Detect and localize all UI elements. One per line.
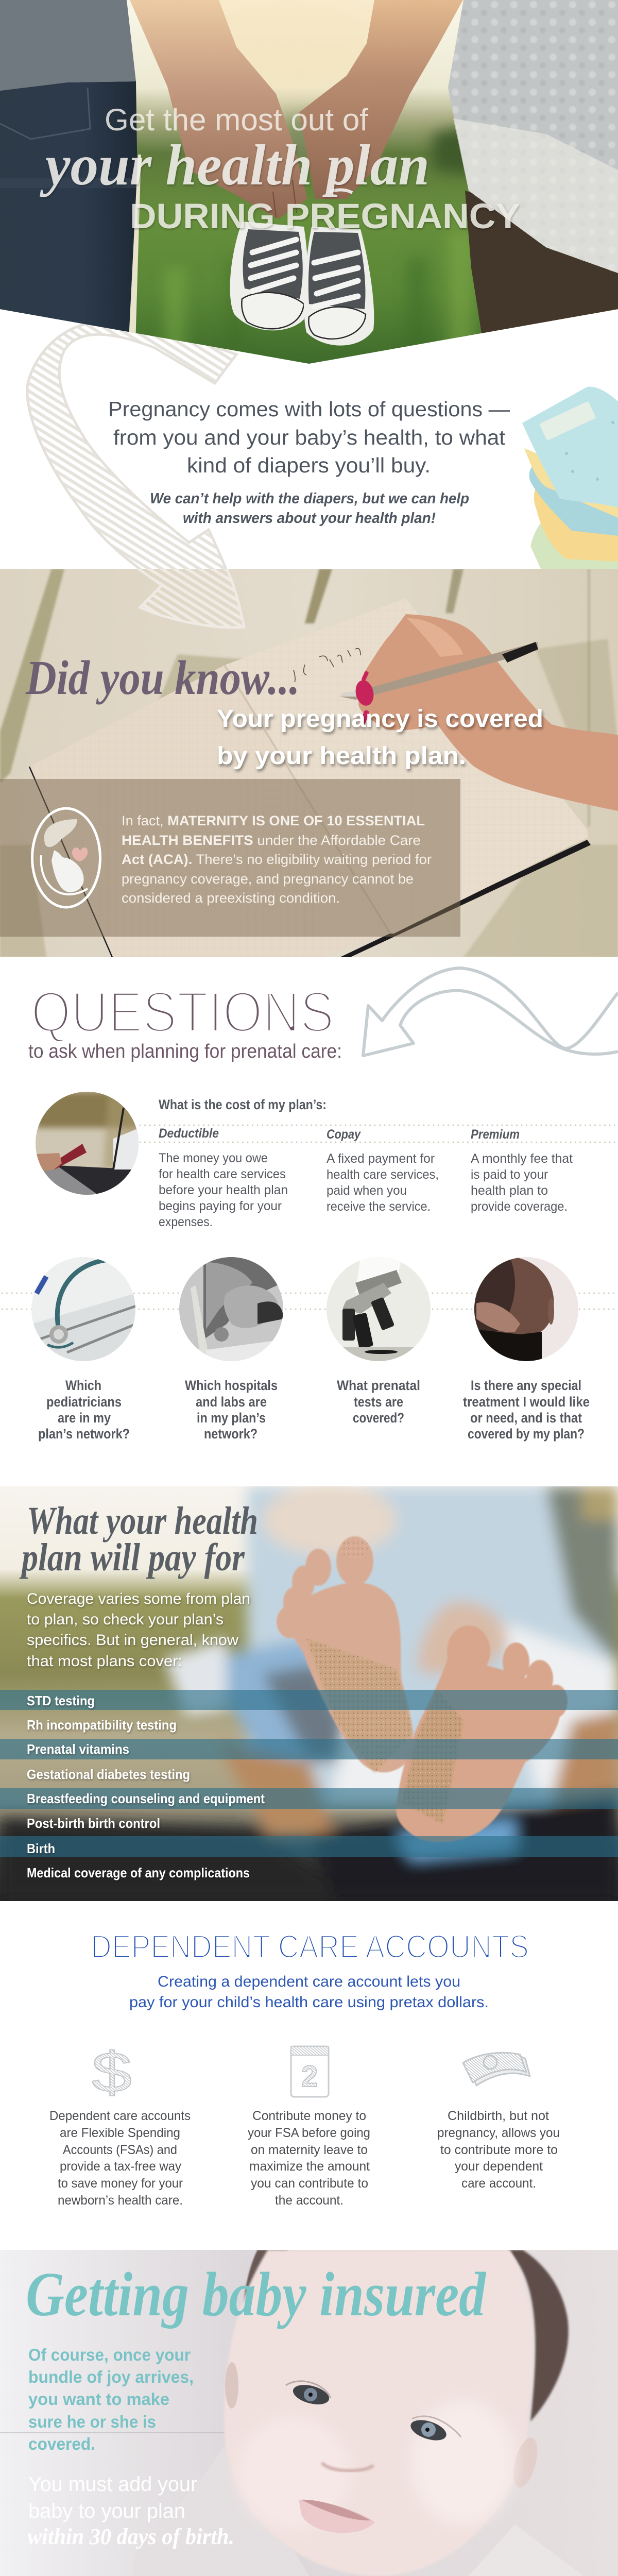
column text: childbirth: your dependent bbox=[455, 2159, 543, 2174]
column: copay bbox=[327, 1127, 439, 1214]
question captions: plan’s network? bbox=[38, 1426, 130, 1442]
column: premium: Premium bbox=[471, 1127, 520, 1142]
arrow tip overlay bbox=[132, 564, 244, 628]
panel: getting baby insured bbox=[0, 2250, 618, 2576]
column: copay: paid when you bbox=[327, 1183, 407, 1198]
intro text: Pregnancy comes with lots of questions — bbox=[108, 397, 510, 421]
coverage list: STD testing bbox=[27, 1693, 95, 1708]
questions heading: QUESTIONS bbox=[31, 980, 334, 1044]
30 days message: within 30 days of birth. bbox=[27, 2524, 234, 2549]
hero title bbox=[39, 103, 520, 236]
callout text: Act (ACA). There’s no eligibility waiting period for bbox=[122, 852, 432, 867]
question captions: Is there any special bbox=[471, 1378, 581, 1393]
photo: newborn bbox=[178, 1257, 283, 1362]
panel: intro bbox=[26, 324, 618, 569]
question captions: covered? bbox=[353, 1410, 404, 1426]
column text: dependent accounts: newborn’s health care. bbox=[58, 2193, 183, 2208]
arrow: curved outline bbox=[363, 968, 618, 1056]
cost heading: What is the cost of my plan’s: bbox=[159, 1097, 327, 1112]
column text: dependent accounts: Accounts (FSAs) and bbox=[63, 2143, 177, 2157]
column: deductible: expenses. bbox=[159, 1215, 213, 1229]
question captions: are in my bbox=[58, 1410, 111, 1426]
did you know heading: Did you know... bbox=[25, 651, 300, 705]
column: deductible: begins paying for your bbox=[159, 1199, 282, 1213]
callout text: pregnancy coverage, and pregnancy cannot be bbox=[122, 871, 414, 887]
column: deductible: The money you owe bbox=[159, 1151, 268, 1165]
photo: baby feet bbox=[0, 1484, 618, 1901]
hatched arrow bbox=[27, 322, 244, 628]
coverage list: Prenatal vitamins bbox=[27, 1741, 129, 1757]
icon: calendar bbox=[291, 2046, 329, 2097]
photo: microscope bbox=[325, 1257, 432, 1362]
icon: calendar: 2 bbox=[301, 2060, 318, 2093]
covered statement: by your health plan. bbox=[217, 742, 466, 770]
coverage list: Breastfeeding counseling and equipment bbox=[27, 1791, 265, 1806]
hero title: Get the most out of bbox=[105, 103, 368, 137]
column: premium: provide coverage. bbox=[471, 1199, 568, 1214]
coverage list: Rh incompatibility testing bbox=[27, 1717, 177, 1733]
column text: contribute: maximize the amount bbox=[249, 2159, 370, 2174]
question captions: covered by my plan? bbox=[468, 1426, 585, 1442]
photo: baby face bbox=[0, 2250, 618, 2576]
hero title: DURING PREGNANCY bbox=[130, 196, 520, 236]
column: deductible: for health care services bbox=[159, 1167, 286, 1181]
icon: pregnant mother bbox=[32, 808, 100, 907]
coverage list bbox=[27, 1693, 265, 1880]
feet heading: What your health bbox=[27, 1499, 258, 1543]
dependent care subheading: pay for your child’s health care using pretax dollars. bbox=[129, 1994, 489, 2011]
column text: dependent accounts: provide a tax-free way bbox=[60, 2159, 181, 2174]
coverage list: Medical coverage of any complications bbox=[27, 1865, 250, 1880]
coverage list: Gestational diabetes testing bbox=[27, 1767, 190, 1782]
icon: baby shoes bbox=[230, 222, 374, 346]
column: premium: A monthly fee that bbox=[471, 1151, 573, 1166]
baby text: sure he or she is bbox=[28, 2412, 156, 2431]
question captions bbox=[38, 1378, 590, 1442]
feet heading: plan will pay for bbox=[19, 1536, 245, 1579]
column text: contribute: the account. bbox=[275, 2193, 344, 2208]
questions heading: to ask when planning for prenatal care: bbox=[28, 1041, 342, 1062]
coverage intro text: specifics. But in general, know bbox=[27, 1632, 238, 1649]
column: deductible: Deductible bbox=[159, 1126, 219, 1141]
intro text bbox=[108, 397, 510, 527]
callout text: HEALTH BENEFITS under the Affordable Care bbox=[122, 833, 421, 848]
column text: contribute: your FSA before going bbox=[248, 2126, 370, 2140]
callout text bbox=[122, 813, 432, 906]
question captions: Which bbox=[65, 1378, 101, 1393]
callout text: considered a preexisting condition. bbox=[122, 890, 340, 906]
dependent care subheading: Creating a dependent care account lets you bbox=[158, 1973, 460, 1990]
icon: dollar sign: $ bbox=[92, 2041, 132, 2104]
column: copay: health care services, bbox=[327, 1167, 439, 1182]
notebook photo bbox=[0, 569, 618, 957]
question captions: tests are bbox=[354, 1394, 403, 1410]
column: copay: receive the service. bbox=[327, 1199, 431, 1214]
coverage list strips bbox=[0, 1690, 618, 1857]
baby text bbox=[28, 2345, 194, 2453]
feet heading bbox=[19, 1499, 258, 1579]
baby heading: Getting baby insured bbox=[26, 2260, 487, 2329]
photo: stethoscope bbox=[31, 1257, 136, 1362]
question captions: and labs are bbox=[196, 1394, 267, 1410]
intro text: from you and your baby’s health, to what bbox=[113, 426, 506, 449]
coverage intro text bbox=[27, 1590, 250, 1670]
column: premium: is paid to your bbox=[471, 1167, 548, 1182]
baby text: covered. bbox=[28, 2434, 95, 2453]
coverage intro text: Coverage varies some from plan bbox=[27, 1590, 250, 1607]
column: deductible bbox=[159, 1126, 288, 1229]
column text: contribute bbox=[248, 2109, 370, 2208]
30 days message: You must add your bbox=[28, 2473, 197, 2496]
hero photo bbox=[0, 0, 618, 366]
callout text: In fact, MATERNITY IS ONE OF 10 ESSENTIAL bbox=[122, 813, 425, 828]
column text: dependent accounts bbox=[49, 2109, 191, 2208]
column text: dependent accounts: are Flexible Spending bbox=[60, 2126, 180, 2140]
coverage intro text: to plan, so check your plan’s bbox=[27, 1611, 224, 1628]
icon: money stack bbox=[463, 2053, 530, 2086]
panel: questions bbox=[1, 967, 618, 1442]
column text: contribute: Contribute money to bbox=[252, 2109, 366, 2123]
icon: diaper stack bbox=[522, 387, 618, 569]
column: copay: A fixed payment for bbox=[327, 1151, 435, 1166]
question captions: pediatricians bbox=[46, 1394, 122, 1410]
column text: childbirth: care account. bbox=[461, 2176, 536, 2191]
column: deductible: before your health plan bbox=[159, 1183, 288, 1197]
dependent care heading: DEPENDENT CARE ACCOUNTS bbox=[91, 1929, 529, 1965]
question captions: network? bbox=[204, 1426, 258, 1442]
column text: childbirth bbox=[437, 2109, 560, 2191]
baby text: Of course, once your bbox=[28, 2345, 191, 2364]
30 days message: baby to your plan bbox=[28, 2500, 185, 2522]
baby text: bundle of joy arrives, bbox=[28, 2367, 194, 2386]
covered statement: Your pregnancy is covered bbox=[217, 705, 543, 733]
photo: pregnant belly bbox=[474, 1257, 579, 1362]
question captions: What prenatal bbox=[337, 1378, 420, 1393]
column text: contribute: you can contribute to bbox=[251, 2176, 368, 2191]
covered statement bbox=[217, 705, 543, 770]
column: premium bbox=[471, 1127, 573, 1214]
column: premium: health plan to bbox=[471, 1183, 548, 1198]
column: copay: Copay bbox=[327, 1127, 361, 1142]
panel: did you know bbox=[0, 569, 618, 2436]
dotted rules bbox=[2, 1125, 618, 1309]
intro text: kind of diapers you’ll buy. bbox=[187, 453, 431, 477]
coverage list: Birth bbox=[27, 1841, 55, 1856]
column text: dependent accounts: to save money for your bbox=[58, 2176, 183, 2191]
30 days message bbox=[27, 2473, 234, 2549]
column text: contribute: on maternity leave to bbox=[251, 2143, 368, 2157]
question captions: in my plan’s bbox=[197, 1410, 266, 1426]
question captions: Which hospitals bbox=[185, 1378, 278, 1393]
hero title: your health plan bbox=[39, 133, 430, 197]
column text: childbirth: to contribute more to bbox=[440, 2143, 558, 2157]
intro text: We can’t help with the diapers, but we can help bbox=[150, 490, 469, 507]
callout: maternity benefit bbox=[0, 779, 460, 937]
intro text: with answers about your health plan! bbox=[183, 510, 436, 527]
panel: hero bbox=[0, 0, 618, 364]
photo: paying with credit card bbox=[36, 1092, 139, 1195]
baby foot left bbox=[277, 1536, 413, 1772]
panel: what your plan will pay for bbox=[0, 1486, 618, 1901]
baby text: you want to make bbox=[28, 2389, 169, 2409]
baby foot right bbox=[396, 1625, 568, 1842]
question captions: or need, and is that bbox=[470, 1410, 582, 1426]
column text: childbirth: Childbirth, but not bbox=[448, 2109, 549, 2123]
coverage intro text: that most plans cover: bbox=[27, 1653, 182, 1670]
column text: dependent accounts: Dependent care accounts bbox=[49, 2109, 191, 2123]
question captions: treatment I would like bbox=[463, 1394, 590, 1410]
dependent care subheading bbox=[129, 1973, 489, 2011]
panel: dependent care accounts bbox=[49, 1929, 560, 2208]
coverage list: Post-birth birth control bbox=[27, 1816, 160, 1831]
column text: childbirth: pregnancy, allows you bbox=[437, 2126, 560, 2140]
